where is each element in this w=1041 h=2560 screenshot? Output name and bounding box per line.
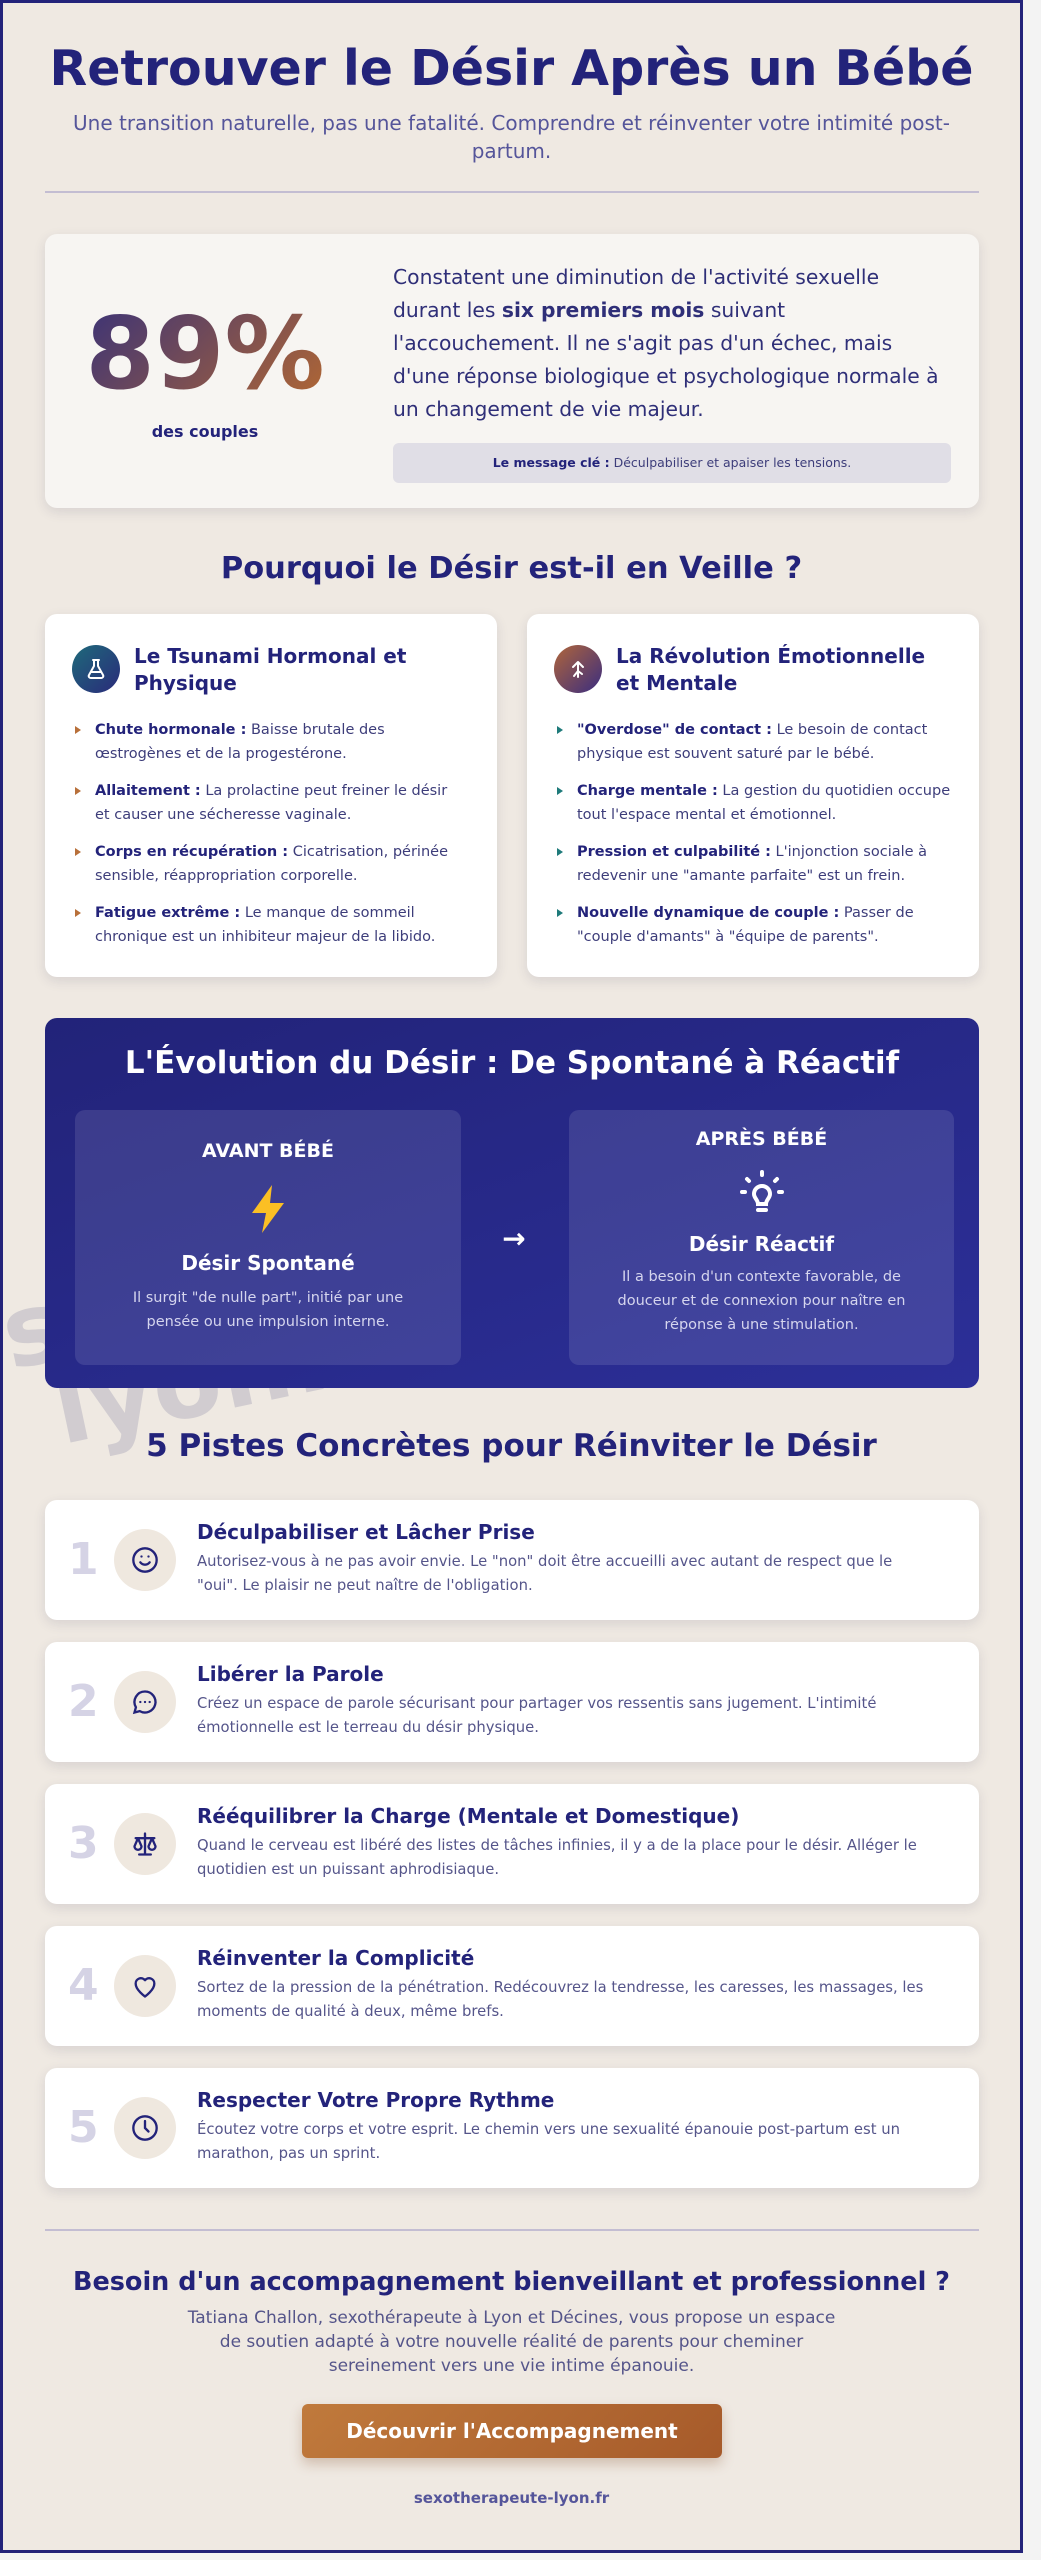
icon: chat [114, 1671, 176, 1733]
piste 4: 4 [68, 1960, 99, 2011]
icon: heart [114, 1955, 176, 2017]
subtitle: Une transition naturelle, pas une fatalité. Comprendre et réinventer votre intimité post-partum. [73, 111, 950, 163]
stat description: un changement de vie majeur. [393, 397, 704, 421]
piste 4: Sortez de la pression de la pénétration. Redécouvrez la tendresse, les caresses, les massages, les moments de qualité à deux, même brefs. [197, 1979, 923, 2020]
piste 2 [45, 1642, 979, 1762]
box: before [75, 1110, 461, 1365]
bullet list: Fatigue extrême : Le manque de sommeil chronique est un inhibiteur majeur de la libido. [95, 905, 435, 945]
piste 5: Écoutez votre corps et votre esprit. Le chemin vers une sexualité épanouie post-partum est un marathon, pas un sprint. [197, 2121, 900, 2162]
box: after: Désir Réactif [689, 1232, 834, 1256]
bullet list: Chute hormonale : Baisse brutale des œstrogènes et de la progestérone. [95, 722, 385, 762]
stat description: Constatent une diminution de l'activité sexuelle [393, 265, 879, 289]
piste 3: Quand le cerveau est libéré des listes de tâches infinies, il y a de la place pour le désir. Alléger le quotidien est un puissant aphrodisiaque. [197, 1837, 917, 1878]
key message box: Le message clé : Déculpabiliser et apaiser les tensions. [493, 455, 851, 470]
icon: flask [72, 645, 120, 693]
bullet list [75, 722, 448, 945]
piste 2: 2 [68, 1676, 99, 1727]
icon: scale [114, 1813, 176, 1875]
stat description: d'une réponse biologique et psychologique normale à [393, 364, 939, 388]
icon: clock [114, 2097, 176, 2159]
watermark: lyon.fr [43, 1276, 429, 1468]
button: Découvrir l'Accompagnement [346, 2419, 678, 2443]
icon: smile [114, 1529, 176, 1591]
bullet list: Allaitement : La prolactine peut freiner le désir et causer une sécheresse vaginale. [95, 783, 447, 823]
button [302, 2404, 722, 2458]
arrow: → [502, 1222, 526, 1255]
bullet list: Pression et culpabilité : L'injonction sociale à redevenir une "amante parfaite" est un frein. [577, 844, 927, 884]
piste 1 [45, 1500, 979, 1620]
stat card [45, 234, 979, 508]
title: Retrouver le Désir Après un Bébé [49, 40, 974, 97]
piste 1: Déculpabiliser et Lâcher Prise [197, 1520, 535, 1544]
piste 2: Créez un espace de parole sécurisant pour partager vos ressentis sans jugement. L'intimité émotionnelle est le terreau du désir physique. [197, 1695, 876, 1736]
bullet list: "Overdose" de contact : Le besoin de contact physique est souvent saturé par le bébé. [577, 722, 927, 762]
bullet list: Nouvelle dynamique de couple : Passer de "couple d'amants" à "équipe de parents". [577, 905, 914, 945]
icon: split arrow [554, 645, 602, 693]
footer heading: Besoin d'un accompagnement bienveillant et professionnel ? [73, 2267, 950, 2297]
box: after [569, 1110, 954, 1365]
box: before: AVANT BÉBÉ [202, 1140, 334, 1162]
box: before: Désir Spontané [181, 1251, 355, 1275]
heading: La Révolution Émotionnelle et Mentale [616, 644, 925, 695]
stat description: durant les six premiers mois suivant [393, 298, 785, 322]
icon: lightning [252, 1185, 284, 1233]
big stat 89%: 89% [85, 295, 325, 412]
piste 4: Réinventer la Complicité [197, 1946, 474, 1970]
stat description: l'accouchement. Il ne s'agit pas d'un échec, mais [393, 331, 892, 355]
stat label: des couples [152, 422, 258, 441]
footer text: Tatiana Challon, sexothérapeute à Lyon et Décines, vous propose un espace de soutien adapté à votre nouvelle réalité de parents pour cheminer sereinement vers une vie intime épanouie. [188, 2308, 835, 2376]
panel: emotional [527, 614, 979, 977]
piste 3: Rééquilibrer la Charge (Mentale et Domestique) [197, 1804, 739, 1828]
piste 3 [45, 1784, 979, 1904]
piste 2: Libérer la Parole [197, 1662, 384, 1686]
heading: pourquoi: Pourquoi le Désir est-il en Veille ? [221, 551, 802, 586]
piste 5 [45, 2068, 979, 2188]
panel: evolution [45, 1018, 979, 1388]
piste 5: Respecter Votre Propre Rythme [197, 2088, 554, 2112]
piste 1: Autorisez-vous à ne pas avoir envie. Le "non" doit être accueilli avec autant de respect que le "oui". Le plaisir ne peut naître de l'obligation. [197, 1553, 892, 1594]
icon: bulb [740, 1170, 784, 1212]
box: before: Il surgit "de nulle part", initié par une pensée ou une impulsion interne. [133, 1290, 403, 1330]
bullet list: Corps en récupération : Cicatrisation, périnée sensible, réappropriation corporelle. [95, 844, 448, 884]
heading: pistes: 5 Pistes Concrètes pour Réinviter le Désir [146, 1428, 877, 1464]
stat description [393, 265, 939, 421]
bullet list: Charge mentale : La gestion du quotidien occupe tout l'espace mental et émotionnel. [577, 783, 950, 823]
key message box [393, 443, 951, 483]
box: after: Il a besoin d'un contexte favorable, de douceur et de connexion pour naître en réponse à une stimulation. [618, 1269, 905, 1333]
panel: hormonal [45, 614, 497, 977]
piste 4 [45, 1926, 979, 2046]
watermark: sexotherapeute- [0, 1085, 927, 1393]
box: after: APRÈS BÉBÉ [696, 1128, 827, 1150]
piste 3: 3 [68, 1818, 99, 1869]
heading: Le Tsunami Hormonal et Physique [134, 644, 406, 695]
evolution heading: L'Évolution du Désir : De Spontané à Réactif [125, 1045, 899, 1081]
bullet list [557, 722, 950, 945]
url: sexotherapeute-lyon.fr [414, 2489, 609, 2507]
piste 5: 5 [68, 2102, 99, 2153]
piste 1: 1 [68, 1534, 99, 1585]
